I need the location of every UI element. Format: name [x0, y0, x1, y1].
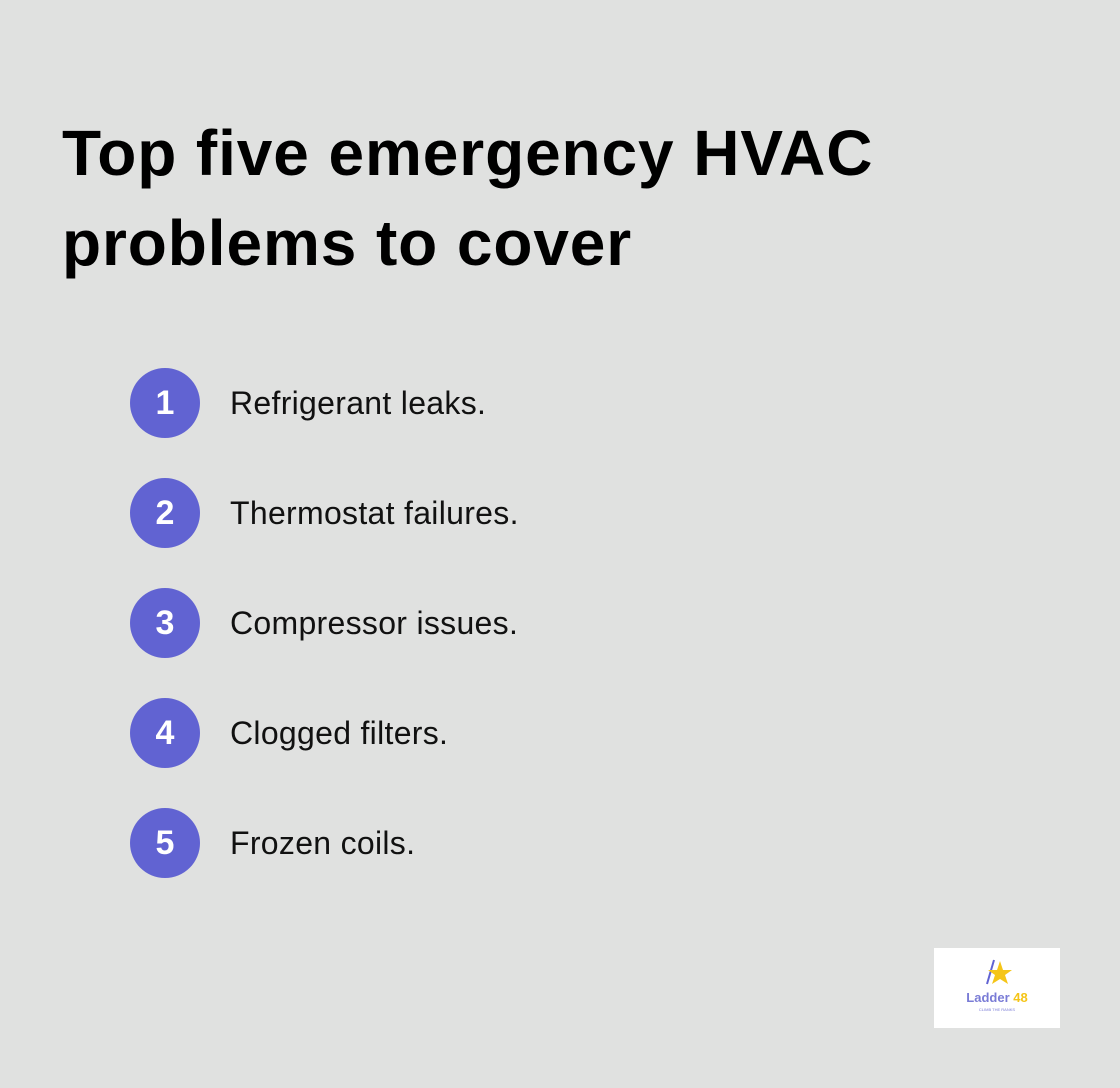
title	[62, 117, 873, 279]
logo	[934, 948, 1060, 1028]
list item 3: 3	[156, 604, 174, 642]
title: problems to cover	[62, 207, 632, 279]
list item 2: Thermostat failures.	[230, 495, 519, 531]
logo: CLIMB THE RANKS	[979, 1007, 1015, 1012]
list item 1: Refrigerant leaks.	[230, 385, 486, 421]
list item 3	[130, 588, 518, 658]
list item 5	[130, 808, 415, 878]
list item 4: 4	[156, 714, 174, 752]
list item 4	[130, 698, 448, 768]
list item 2: 2	[156, 494, 174, 532]
list item 3: Compressor issues.	[230, 605, 518, 641]
title: Top five emergency HVAC	[62, 117, 873, 189]
list item 5: 5	[156, 824, 174, 862]
list item 4: Clogged filters.	[230, 715, 448, 751]
list item 1	[130, 368, 486, 438]
logo: Ladder 48	[966, 990, 1028, 1005]
list item 5: Frozen coils.	[230, 825, 415, 861]
list item 1: 1	[156, 384, 174, 422]
list item 2	[130, 478, 519, 548]
